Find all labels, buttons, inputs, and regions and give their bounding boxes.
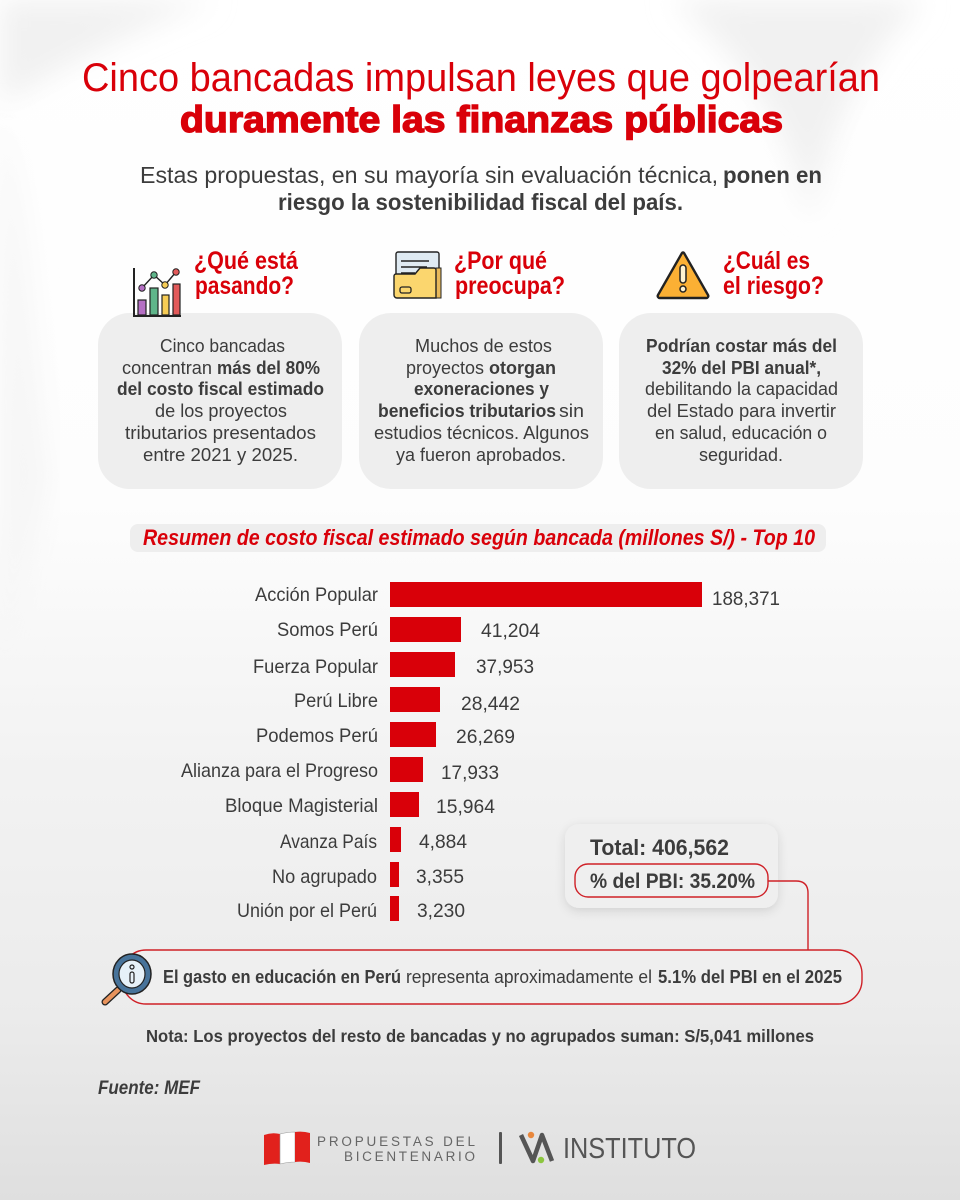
icon: folder (394, 252, 441, 298)
panel: qué está pasando: entre 2021 y 2025. (143, 444, 298, 465)
panel: cuál es el riesgo: Podrían costar más del (646, 335, 837, 356)
source: Fuente: MEF (98, 1078, 201, 1099)
bar chart: Alianza para el Progreso (181, 760, 378, 782)
bar chart: 3,355 (416, 866, 464, 888)
panel: qué está pasando: de los proyectos (155, 400, 287, 421)
bar chart: 26,269 (456, 726, 515, 748)
callout: representa aproximadamente el (406, 967, 652, 987)
bar chart: Fuerza Popular (253, 656, 378, 678)
heading: por qué preocupa: preocupa? (455, 272, 565, 300)
bar chart: 15,964 (436, 796, 495, 818)
heading: qué está pasando: pasando? (195, 272, 294, 300)
panel: por qué preocupa: sin (559, 400, 584, 421)
subtitle: riesgo la sostenibilidad fiscal del país. (278, 189, 683, 215)
panel: qué está pasando: tributarios presentados (125, 422, 316, 443)
bar chart: No agrupado (272, 866, 377, 888)
bar chart: Acción Popular (255, 584, 378, 606)
bar chart: 41,204 (481, 620, 540, 642)
panel: cuál es el riesgo: seguridad. (699, 444, 783, 465)
bar chart: Podemos Perú (256, 725, 378, 747)
total box: % del PBI: 35.20% (590, 870, 755, 893)
logo: propuestas del bicentenario (264, 1132, 475, 1165)
title: Cinco bancadas impulsan leyes que golpearían (82, 56, 880, 100)
panel: cuál es el riesgo: 32% del PBI anual*, (662, 357, 821, 378)
logo: instituto (521, 1132, 696, 1165)
icon: magnifier (105, 954, 151, 1002)
total box (565, 824, 778, 908)
bar chart: Perú Libre (294, 690, 378, 712)
title: duramente las finanzas públicas (180, 99, 783, 140)
title (82, 56, 880, 140)
total box: Total: 406,562 (590, 835, 729, 860)
logo: instituto: INSTITUTO (563, 1133, 696, 1165)
bar chart: Avanza País (280, 831, 377, 853)
heading: cuál es el riesgo (723, 247, 824, 300)
panel: cuál es el riesgo: del Estado para invertir (647, 400, 836, 421)
heading: por qué preocupa (454, 247, 565, 300)
bar chart: 3,230 (417, 900, 465, 922)
subtitle: ponen en (723, 162, 822, 188)
bar chart: 188,371 (712, 588, 780, 610)
panel: por qué preocupa: beneficios tributarios (378, 400, 556, 421)
panel: qué está pasando: concentran (122, 357, 212, 378)
logo: propuestas del bicentenario: BICENTENARIO (344, 1149, 475, 1164)
bar chart: Bloque Magisterial (225, 795, 378, 817)
heading: cuál es el riesgo: el riesgo? (723, 272, 824, 300)
callout: 5.1% del PBI en el 2025 (658, 967, 842, 987)
icon: chart (134, 268, 181, 316)
subtitle: Estas propuestas, en su mayoría sin evaluación técnica, (140, 162, 718, 188)
heading: qué está pasando (194, 247, 298, 300)
chart heading: Resumen de costo fiscal estimado según bancada (millones S/) - Top 10 (143, 525, 816, 550)
panel: por qué preocupa: estudios técnicos. Algunos (374, 422, 589, 443)
note: Nota: Los proyectos del resto de bancadas y no agrupados suman: S/5,041 millones (146, 1026, 814, 1046)
panel: por qué preocupa: ya fueron aprobados. (396, 444, 566, 465)
panel: por qué preocupa: exoneraciones y (414, 378, 550, 399)
panel: qué está pasando: Cinco bancadas (160, 335, 285, 356)
connector (768, 881, 808, 950)
bar chart: 28,442 (461, 693, 520, 715)
panel: qué está pasando: del costo fiscal estimado (117, 378, 324, 399)
panel: por qué preocupa: otorgan (489, 357, 556, 378)
icon: warning (658, 252, 708, 298)
callout: El gasto en educación en Perú (163, 967, 401, 987)
heading: por qué preocupa: ¿Por qué (454, 247, 547, 275)
panel: por qué preocupa: Muchos de estos (415, 335, 552, 356)
logo: propuestas del bicentenario: PROPUESTAS DEL (317, 1134, 475, 1149)
divider (499, 1132, 502, 1164)
bar chart: 17,933 (441, 762, 499, 784)
callout (122, 950, 862, 1004)
bar chart: Unión por el Perú (237, 900, 377, 922)
panel: qué está pasando (98, 313, 342, 489)
panel: cuál es el riesgo: debilitando la capacidad (645, 378, 838, 399)
heading: qué está pasando: ¿Qué está (194, 247, 298, 275)
bar chart: 37,953 (476, 656, 534, 678)
panel: por qué preocupa (359, 313, 603, 489)
bar chart (181, 582, 780, 922)
heading: cuál es el riesgo: ¿Cuál es (723, 247, 810, 275)
panel: cuál es el riesgo (619, 313, 863, 489)
panel: por qué preocupa: proyectos (406, 357, 484, 378)
subtitle (140, 162, 822, 215)
bar chart: Somos Perú (277, 619, 378, 641)
bar chart: 4,884 (419, 831, 467, 853)
panel: cuál es el riesgo: en salud, educación o (655, 422, 827, 443)
panel: qué está pasando: más del 80% (217, 357, 320, 378)
